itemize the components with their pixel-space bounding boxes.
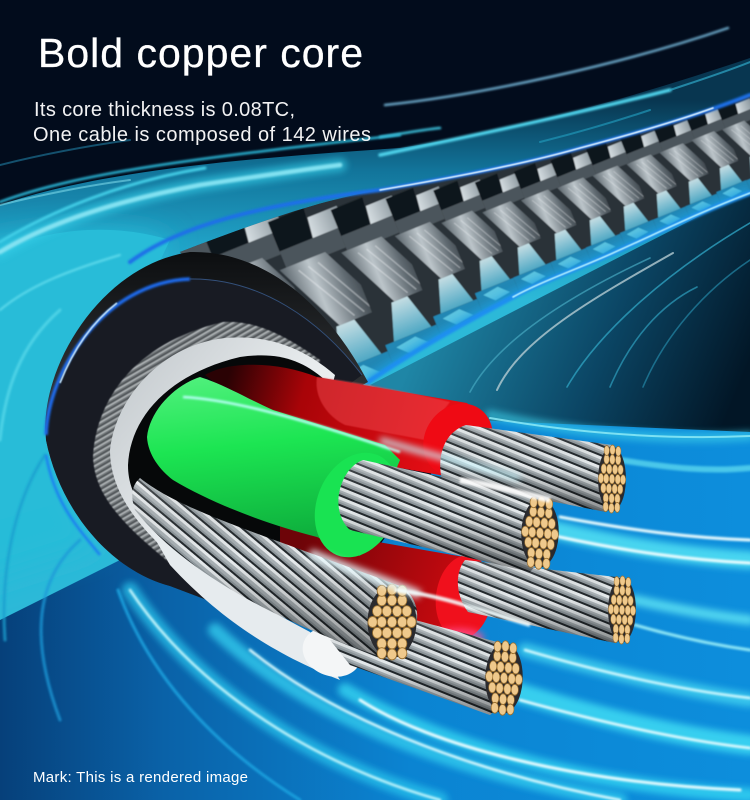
strand: lower silver (330, 620, 524, 717)
green wire (147, 377, 520, 570)
description text (33, 99, 371, 146)
description text: Its core thickness is 0.08TC, (34, 99, 295, 121)
lower red wire (280, 525, 498, 650)
light streaks: under sleeve (470, 223, 750, 392)
light streaks: left fan (0, 255, 120, 720)
strand: green core (338, 460, 560, 572)
description text: One cable is composed of 142 wires (33, 124, 371, 146)
light streaks: upper (0, 28, 750, 252)
strand: large front silver (132, 478, 530, 660)
strand: lower right (458, 560, 637, 645)
light streaks: bottom sweep (118, 590, 750, 800)
strand: upper right (440, 425, 627, 514)
sleeve highlight edges (130, 95, 750, 382)
black outer jacket (45, 252, 368, 620)
silver braided shield and white foil (93, 322, 335, 630)
white inner tube (150, 530, 368, 685)
light streaks: right (490, 415, 750, 650)
braided sleeve (180, 96, 750, 380)
upper red wire (205, 365, 507, 490)
footnote: Mark: This is a rendered image (33, 769, 248, 786)
title: Bold copper core (38, 30, 363, 76)
